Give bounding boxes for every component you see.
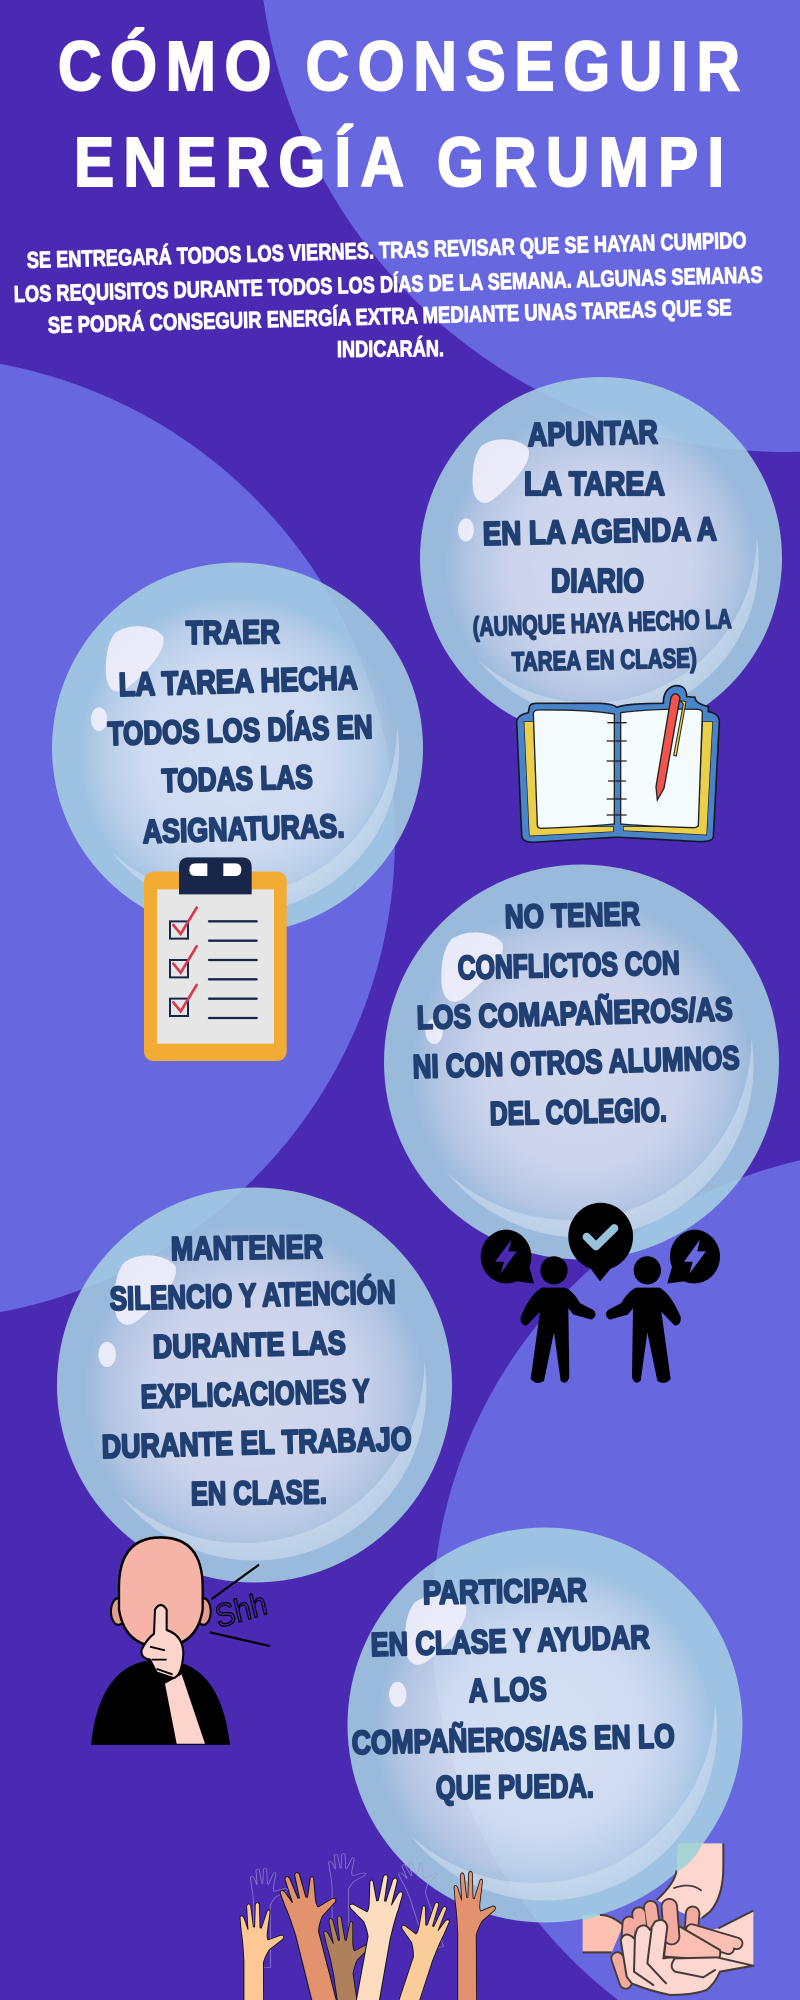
- background circle: left: [0, 356, 395, 1320]
- text: no tener conflictos: LOS COMAPAÑEROS/AS: [416, 990, 733, 1036]
- panel: traer la tarea: [52, 562, 423, 1061]
- text: apuntar la tarea: APUNTAR: [527, 413, 658, 453]
- text: traer la tarea: ASIGNATURAS.: [142, 807, 345, 850]
- intro paragraph: [13, 226, 763, 362]
- text: participar en clase: A LOS: [468, 1670, 547, 1709]
- text: traer la tarea: TODOS LOS DÍAS EN: [107, 708, 373, 752]
- text: no tener conflictos: CONFLICTOS CON: [457, 944, 680, 986]
- text: apuntar la tarea: [472, 413, 732, 677]
- fingers behind: [628, 1908, 693, 1937]
- panel: no tener conflictos: [384, 864, 779, 1383]
- icon: person saying shh: Shh: [211, 1585, 270, 1635]
- panel: mantener silencio: [57, 1188, 452, 1745]
- text: no tener conflictos: [412, 895, 740, 1132]
- icon: two people talking: [481, 1203, 720, 1383]
- panel: apuntar la tarea: [420, 377, 782, 842]
- background circle: bottom right: [432, 1148, 800, 2000]
- text: apuntar la tarea: DIARIO: [551, 562, 644, 599]
- background circle: top right: [258, 0, 800, 452]
- text: traer la tarea: LA TAREA HECHA: [118, 659, 358, 703]
- coloured hands: [240, 1865, 496, 2000]
- title: CÓMO CONSEGUIR: [58, 27, 740, 105]
- title: ENERGÍA GRUMPI: [74, 123, 724, 201]
- text: mantener silencio: EXPLICACIONES Y: [140, 1372, 370, 1415]
- icon: person saying shh: [91, 1537, 270, 1745]
- text: apuntar la tarea: LA TAREA: [524, 465, 665, 502]
- title: [58, 27, 740, 201]
- panel: participar en clase: [240, 1528, 753, 2000]
- text: mantener silencio: EN CLASE.: [191, 1473, 327, 1512]
- text: mantener silencio: MANTENER: [171, 1228, 323, 1267]
- bubble 5: [348, 1528, 742, 1922]
- text: mantener silencio: DURANTE EL TRABAJO: [101, 1420, 412, 1465]
- text: no tener conflictos: NO TENER: [504, 895, 640, 935]
- text: participar en clase: PARTICIPAR: [422, 1571, 587, 1611]
- text: mantener silencio: SILENCIO Y ATENCIÓN: [109, 1273, 396, 1317]
- icon: notebook and pen: [517, 686, 719, 842]
- text: mantener silencio: [101, 1228, 412, 1512]
- ghost hands: [250, 1853, 459, 1967]
- text: traer la tarea: TODAS LAS: [161, 758, 313, 799]
- bubble 2: [52, 562, 423, 934]
- intro paragraph: INDICARÁN.: [337, 334, 444, 362]
- icon: raised hands: [240, 1853, 496, 2000]
- text: participar en clase: COMPAÑEROS/AS EN LO: [351, 1717, 675, 1761]
- bubble 1: [420, 377, 782, 739]
- text: participar en clase: QUE PUEDA.: [436, 1767, 594, 1806]
- front hand: [621, 1920, 753, 1995]
- text: traer la tarea: TRAER: [186, 613, 280, 651]
- text: apuntar la tarea: TAREA EN CLASE): [511, 643, 697, 677]
- text: traer la tarea: [107, 613, 373, 850]
- text: participar en clase: [351, 1571, 675, 1806]
- bubble 4: [57, 1188, 452, 1582]
- icon: cupped helping hands: [583, 1843, 753, 1995]
- text: apuntar la tarea: EN LA AGENDA A: [482, 510, 717, 552]
- bubble 3: [384, 864, 779, 1260]
- text: participar en clase: EN CLASE Y AYUDAR: [370, 1618, 650, 1663]
- icon: clipboard checklist: [144, 857, 287, 1061]
- text: mantener silencio: DURANTE LAS: [152, 1324, 346, 1365]
- text: no tener conflictos: DEL COLEGIO.: [489, 1091, 667, 1132]
